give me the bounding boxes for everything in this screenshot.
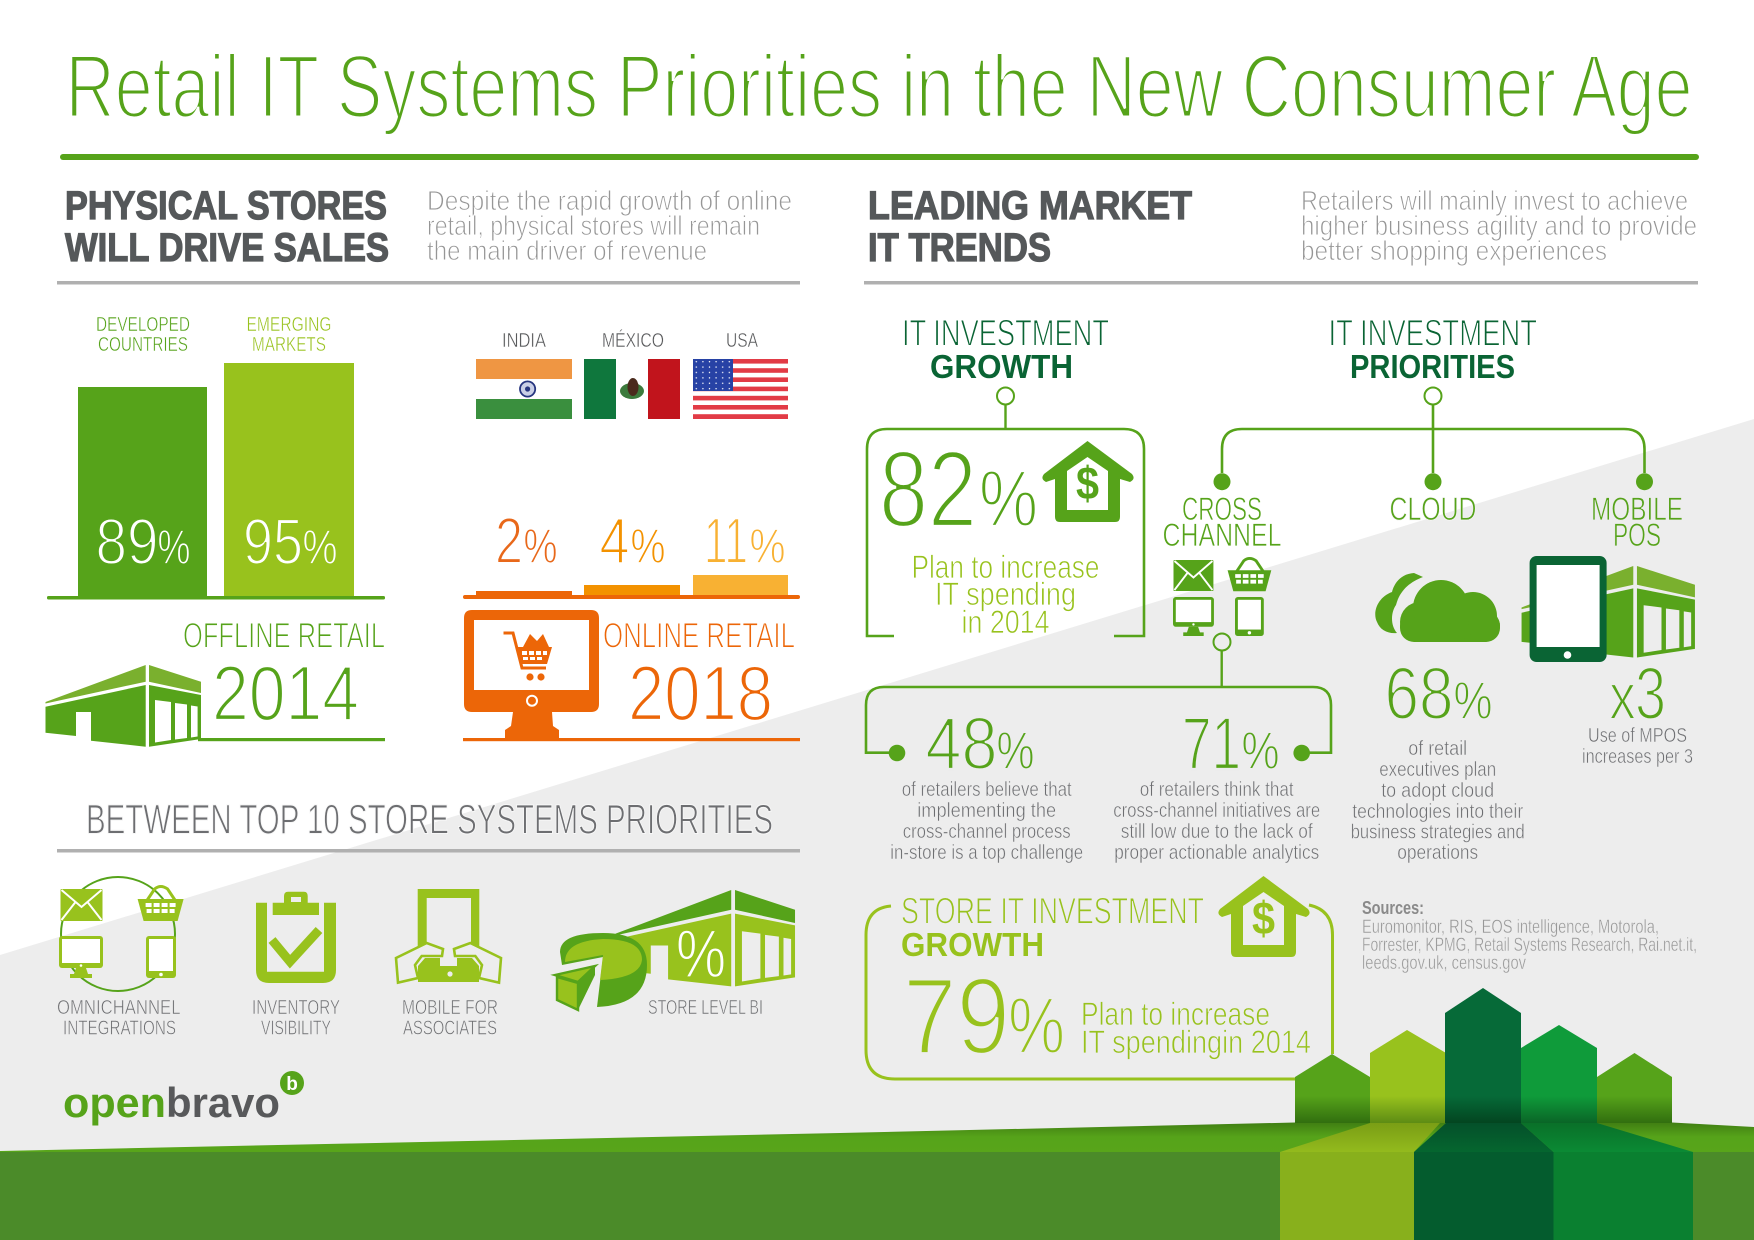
heading: physical stores: WILL DRIVE SALES [65, 226, 389, 270]
text: plan to increase: Plan to increase [912, 549, 1100, 585]
icon: store level BI: % [676, 916, 726, 992]
text: 68% description: of retail [1408, 737, 1467, 760]
heading: leading market [868, 184, 1192, 270]
intro text: physical stores: the main driver of revenue [427, 235, 707, 266]
flag labels: MÉXICO [602, 329, 664, 352]
value 2%: 2 [495, 504, 523, 577]
label: offline retail 2014 [183, 617, 385, 737]
value 82%: % [979, 454, 1038, 543]
text: 68% description: operations [1397, 841, 1478, 864]
text: plan to increase: Plan to increase [1081, 996, 1270, 1032]
heading: store IT investment growth [901, 891, 1204, 963]
label: online retail 2018 [603, 617, 795, 737]
label: omnichannel: INTEGRATIONS [63, 1016, 176, 1040]
value 79%: 79 [903, 956, 1010, 1078]
value 89%: 89 [96, 505, 158, 578]
flag labels: USA [726, 330, 759, 352]
heading: IT investment priorities: PRIORITIES [1350, 348, 1515, 385]
heading: IT investment growth: GROWTH [930, 348, 1073, 385]
box outline [866, 905, 1332, 1079]
panel: physical stores [46, 184, 800, 747]
value 48%: % [996, 722, 1034, 780]
text: 68% description: executives plan [1379, 758, 1496, 781]
label: mobile for associates [402, 996, 498, 1040]
label: omnichannel: OMNICHANNEL [57, 996, 180, 1019]
heading: leading market: LEADING MARKET [868, 184, 1192, 228]
icon: cloud [1375, 573, 1500, 642]
node: growth [997, 388, 1014, 404]
icon: house with dollar: $ [1076, 457, 1099, 509]
intro text: physical stores: Despite the rapid growth of online [427, 185, 792, 216]
bar labels: DEVELOPED [96, 314, 190, 336]
text: 68% description: technologies into their [1352, 800, 1523, 823]
icon: house with dollar: $ [1252, 892, 1275, 944]
icon: house with dollar [1218, 876, 1310, 957]
text: 48% description: in-store is a top challenge [890, 841, 1083, 864]
connector tree: priorities [1222, 405, 1644, 473]
label: mobile for associates: MOBILE FOR [402, 996, 498, 1019]
value 4% [600, 504, 666, 577]
value 79%: % [1008, 981, 1065, 1070]
value x3: 3 [1635, 652, 1666, 735]
section rule [864, 281, 1698, 284]
logo: openbravo [63, 1071, 304, 1126]
text: 68% description: to adopt cloud [1381, 779, 1494, 802]
heading: leading market: IT TRENDS [868, 226, 1051, 270]
node: cross channel [1214, 634, 1230, 650]
label: mobile POS: POS [1613, 517, 1661, 553]
text: sources: Euromonitor, RIS, EOS intelligence, Motorola, [1362, 917, 1659, 938]
icon: house with dollar [1042, 441, 1134, 522]
value 4%: 4 [600, 504, 630, 577]
text: 71% description: proper actionable analytics [1114, 841, 1319, 864]
label: cross channel: CHANNEL [1162, 517, 1282, 553]
text: plan to increase [912, 549, 1100, 640]
text: 68% description [1351, 737, 1525, 864]
icon: inventory clipboard [256, 892, 336, 983]
label: cross channel: CROSS [1182, 491, 1262, 527]
label: mobile POS [1591, 491, 1683, 553]
connector: growth [1004, 405, 1007, 429]
value 11%: 11 [704, 504, 748, 577]
bars: online share [463, 575, 800, 599]
bar labels: COUNTRIES [98, 334, 188, 356]
label: mobile POS: MOBILE [1591, 491, 1683, 527]
bar labels [96, 314, 332, 356]
label: inventory: INVENTORY [252, 996, 340, 1019]
flag labels [502, 329, 759, 352]
logo: openbravo: open [63, 1079, 166, 1126]
label: mobile for associates: ASSOCIATES [403, 1016, 497, 1040]
icon: store [46, 665, 201, 747]
icon: omnichannel integrations [59, 877, 184, 991]
text: 71% description [1113, 778, 1320, 864]
background: grey diagonal area [0, 419, 1754, 1240]
text: plan to increase: IT spending [935, 576, 1076, 612]
text: 71% description: still low due to the lack of [1121, 820, 1313, 843]
section rule [57, 281, 800, 284]
branch nodes [1214, 473, 1653, 490]
flag: India [476, 359, 572, 419]
intro text: physical stores: retail, physical stores will remain [427, 210, 760, 241]
label: inventory: VISIBILITY [261, 1016, 331, 1040]
heading: IT investment growth: IT INVESTMENT [902, 312, 1109, 354]
value x3: x [1609, 659, 1636, 733]
value 2%: % [524, 520, 558, 574]
label: offline retail 2014: OFFLINE RETAIL [183, 617, 385, 656]
flag labels: INDIA [502, 330, 547, 352]
value 95%: 95 [243, 505, 303, 578]
value 95%: % [302, 522, 338, 574]
box: cross channel stats [866, 687, 1331, 753]
logo: openbravo: bravo [166, 1079, 280, 1126]
bar labels: MARKETS [252, 334, 326, 356]
text: 48% description: of retailers believe that [902, 778, 1072, 801]
text: 71% description: cross-channel initiatives are [1113, 799, 1320, 822]
rule: online [463, 738, 800, 741]
arrows: rising growth [1295, 988, 1672, 1123]
value 68%: % [1454, 672, 1492, 730]
label: store level BI: STORE LEVEL BI [648, 996, 763, 1019]
text: plan to increase: in 2014 [962, 604, 1050, 640]
icon: mobile for associates [396, 889, 501, 983]
text: x3 description: increases per 3 [1582, 745, 1693, 768]
text: 71% description: of retailers think that [1140, 778, 1294, 801]
intro text: trends: better shopping experiences [1301, 235, 1607, 266]
value x3 [1609, 652, 1666, 735]
value 48%: 48 [926, 702, 998, 785]
icon: store level BI [555, 890, 795, 1010]
value 71%: % [1242, 722, 1280, 780]
axis [47, 596, 385, 600]
label: offline retail 2014: 2014 [212, 649, 359, 737]
intro text: trends: Retailers will mainly invest to achieve [1301, 185, 1688, 216]
flags and online retail chart [463, 329, 800, 741]
rule: offline [198, 738, 385, 741]
heading: physical stores: PHYSICAL STORES [65, 184, 387, 228]
heading: IT investment priorities: IT INVESTMENT [1328, 312, 1537, 354]
bar: developed [78, 387, 207, 597]
node: priorities [1424, 388, 1442, 404]
bar labels: EMERGING [246, 314, 332, 336]
text: sources: Sources: [1362, 897, 1424, 918]
label: cross channel [1162, 491, 1282, 553]
flag: USA [693, 359, 788, 419]
heading: IT investment growth [902, 312, 1109, 385]
text: x3 description: Use of MPOS [1588, 724, 1687, 747]
bar: emerging [224, 363, 354, 597]
value 82%: 82 [879, 428, 977, 550]
box: growth [867, 429, 1144, 636]
heading: store IT investment growth: STORE IT INVESTMENT [901, 891, 1204, 932]
rule: top 10 [57, 849, 800, 852]
text: 48% description [890, 778, 1083, 864]
value 11%: % [750, 520, 786, 574]
text: sources [1362, 897, 1697, 974]
value 2% [495, 504, 558, 577]
label: online retail 2018: ONLINE RETAIL [603, 617, 795, 656]
intro text: trends: higher business agility and to provide [1301, 210, 1697, 241]
value 71%: 71 [1182, 702, 1241, 785]
label: cloud: CLOUD [1390, 491, 1476, 527]
text: sources: leeds.gov.uk, census.gov [1362, 953, 1526, 974]
panel: leading market IT trends [864, 184, 1698, 864]
logo: openbravo: b [286, 1074, 298, 1095]
value 4%: % [630, 520, 666, 574]
value 68%: 68 [1384, 652, 1454, 735]
panel: store IT investment growth [866, 876, 1332, 1079]
flag: Mexico [584, 359, 680, 419]
heading: top 10 store systems priorities: BETWEEN TOP 10 STORE SYSTEMS PRIORITIES [86, 796, 773, 842]
dots: cross channel stats [889, 745, 1310, 761]
heading: store IT investment growth: GROWTH [901, 926, 1044, 963]
intro text: trends [1301, 185, 1697, 266]
heading: physical stores [65, 184, 389, 270]
label: omnichannel [57, 996, 180, 1040]
text: plan to increase: IT spendingin 2014 [1081, 1024, 1311, 1060]
intro text: physical stores [427, 185, 792, 266]
label: online retail 2018: 2018 [628, 649, 773, 737]
label: inventory [252, 996, 340, 1040]
footer: green ground band [0, 1122, 1754, 1240]
value 89%: % [158, 522, 190, 574]
title rule [60, 154, 1699, 160]
text: x3 description [1582, 724, 1693, 768]
heading: IT investment priorities [1328, 312, 1537, 385]
chart: offline retail bars [47, 314, 385, 600]
text: 48% description: implementing the [917, 799, 1056, 822]
icon: store with tablet [1522, 556, 1695, 662]
icons: cross channel [1173, 558, 1271, 636]
text: 68% description: business strategies and [1351, 820, 1525, 844]
text: plan to increase [1081, 996, 1311, 1060]
text: 48% description: cross-channel process [903, 820, 1071, 843]
connector: cross channel [1220, 651, 1223, 687]
icon: monitor with cart [464, 610, 599, 738]
